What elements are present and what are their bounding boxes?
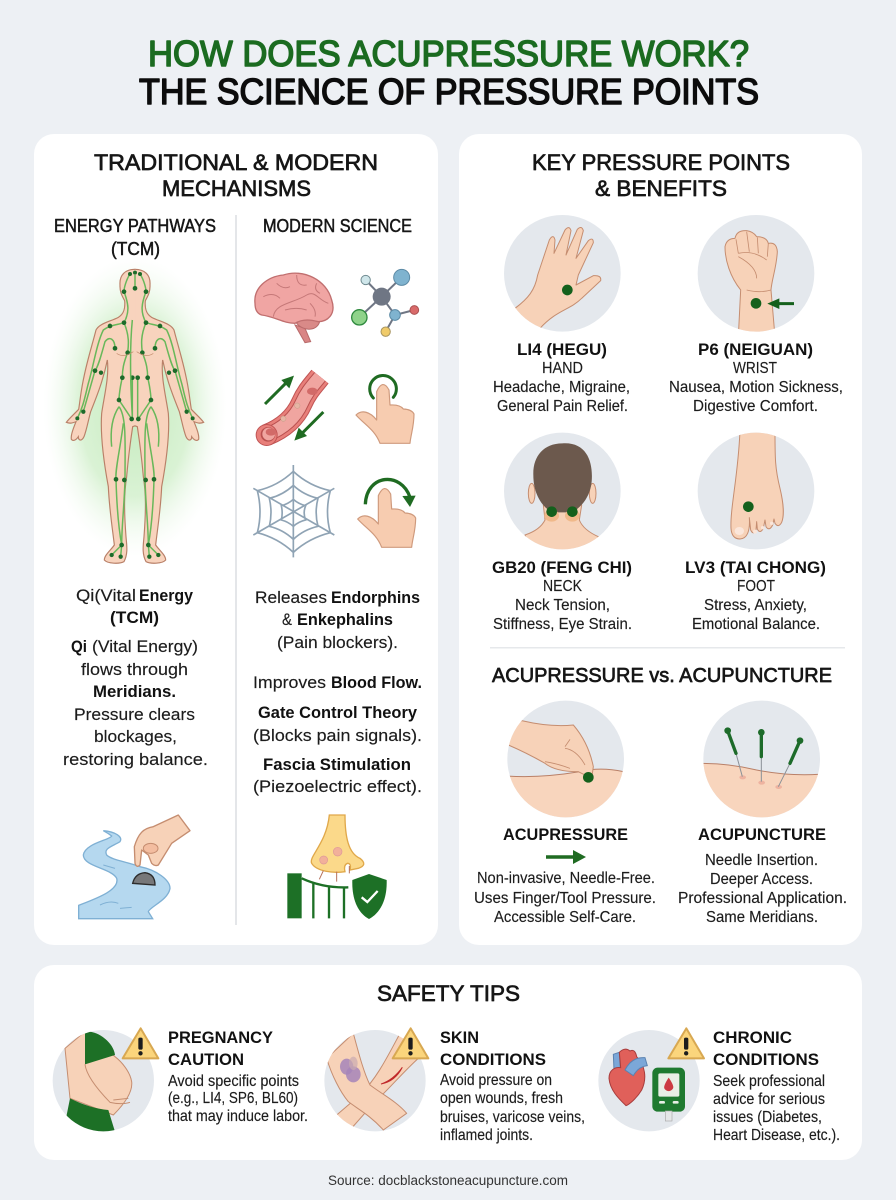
- icon: back of head with GB20 points: [504, 433, 621, 558]
- icon: bruised arms with warning: [324, 1028, 428, 1131]
- comparison: acupuncture: Professional Application.: [678, 890, 847, 907]
- icon: hand with LI4 point: [504, 215, 621, 337]
- safety tip: chronic conditions: issues (Diabetes,: [713, 1109, 822, 1126]
- panel heading: mechanisms: [94, 150, 378, 201]
- column heading: energy pathways: (TCM): [111, 239, 160, 259]
- title: [139, 33, 759, 112]
- safety tip: pregnancy: PREGNANCY: [168, 1028, 274, 1047]
- safety tip: chronic conditions: Seek professional: [713, 1073, 825, 1090]
- pressure point: LV3 foot: [685, 430, 826, 633]
- text block: TCM explanation: flows through: [81, 660, 188, 679]
- text block: modern science explanation: (Pain blockers).: [277, 633, 398, 652]
- text block: modern science explanation: Enkephalins: [297, 610, 393, 629]
- icon: finger press with rotating arrow: [358, 479, 416, 547]
- text block: modern science explanation: Fascia Stimulation: [263, 755, 411, 774]
- panel: traditional and modern mechanisms: [34, 134, 438, 945]
- pressure point: P6 wrist: [669, 215, 843, 415]
- column heading: energy pathways: [54, 216, 216, 259]
- heading: safety tips: SAFETY TIPS: [377, 981, 520, 1006]
- icon: hand moving stone in river: [79, 815, 190, 919]
- pressure point: LV3 foot: Emotional Balance.: [692, 616, 820, 633]
- safety tip: skin conditions: inflamed joints.: [440, 1127, 533, 1144]
- text block: modern science explanation: Endorphins: [331, 588, 420, 607]
- pressure point: LI4 hand: LI4 (HEGU): [517, 340, 607, 359]
- panel heading: key pressure points: [532, 150, 790, 201]
- comparison: acupuncture: [678, 701, 847, 926]
- pressure point: P6 wrist: Digestive Comfort.: [693, 398, 818, 415]
- panel heading: mechanisms: TRADITIONAL & MODERN: [94, 150, 378, 175]
- comparison: acupuncture: Deeper Access.: [710, 871, 813, 888]
- body meridian figure: [43, 257, 227, 563]
- icon: finger pressing skin: [500, 701, 624, 820]
- title: THE SCIENCE OF PRESSURE POINTS: [139, 71, 759, 112]
- pressure point: GB20 neck: NECK: [543, 578, 582, 595]
- safety tip: skin conditions: CONDITIONS: [440, 1050, 546, 1069]
- panel heading: key pressure points: KEY PRESSURE POINTS: [532, 150, 790, 175]
- comparison: acupuncture: Same Meridians.: [706, 909, 818, 926]
- column heading: energy pathways: ENERGY PATHWAYS: [54, 216, 216, 236]
- pressure point: LI4 hand: General Pain Relief.: [497, 398, 628, 415]
- text block: TCM explanation: restoring balance.: [63, 750, 208, 769]
- text block: TCM explanation: Qi(Vital: [76, 586, 136, 605]
- safety tip: pregnancy: Avoid specific points: [168, 1073, 299, 1090]
- text block: TCM explanation: blockages,: [94, 727, 177, 746]
- text block: modern science explanation: (Piezoelectric effect).: [253, 777, 422, 796]
- heading: acupressure vs acupuncture: ACUPRESSURE vs. ACUPUNCTURE: [492, 665, 832, 687]
- pressure point: LI4 hand: Headache, Migraine,: [493, 379, 630, 396]
- text block: TCM explanation: (Vital Energy): [92, 637, 198, 656]
- safety tip: chronic conditions: Heart Disease, etc.).: [713, 1127, 840, 1144]
- text block: modern science explanation: &: [282, 610, 293, 629]
- safety tip: pregnancy: (e.g., LI4, SP6, BL60): [168, 1090, 298, 1107]
- text block: modern science explanation: Blood Flow.: [331, 673, 422, 692]
- panel: key pressure points and comparison: [459, 134, 862, 945]
- safety tip: chronic conditions: advice for serious: [713, 1091, 825, 1108]
- icon: pregnant belly with warning: [53, 1028, 158, 1132]
- text block: TCM explanation: Qi: [71, 637, 87, 656]
- pressure point: GB20 neck: GB20 (FENG CHI): [492, 558, 632, 577]
- safety tip: pregnancy: CAUTION: [168, 1050, 244, 1069]
- panel: safety tips: [34, 965, 862, 1160]
- safety tip: pregnancy: [53, 1028, 308, 1132]
- text block: modern science explanation: [253, 588, 422, 796]
- comparison: acupressure: Non-invasive, Needle-Free.: [477, 870, 655, 887]
- pressure point: LV3 foot: Stress, Anxiety,: [704, 597, 807, 614]
- pressure point: GB20 neck: Stiffness, Eye Strain.: [493, 616, 632, 633]
- icon: finger press with gate arc: [356, 376, 414, 443]
- icon: brain: [255, 273, 333, 343]
- text block: TCM explanation: Energy: [139, 586, 194, 605]
- pressure point: LI4 hand: [493, 215, 630, 415]
- title: HOW DOES ACUPRESSURE WORK?: [148, 33, 749, 74]
- safety tip: chronic conditions: CHRONIC: [713, 1028, 792, 1047]
- comparison: acupressure: Uses Finger/Tool Pressure.: [474, 890, 656, 907]
- source line: Source: docblackstoneacupuncture.com: [328, 1173, 568, 1188]
- text block: TCM explanation: (TCM): [110, 608, 159, 627]
- pressure point: LI4 hand: HAND: [542, 360, 583, 377]
- comparison: acupressure: [474, 701, 656, 926]
- text block: TCM explanation: Meridians.: [93, 682, 176, 701]
- pressure point: GB20 neck: Neck Tension,: [515, 597, 610, 614]
- safety tip: chronic conditions: [598, 1028, 840, 1144]
- panel heading: mechanisms: MECHANISMS: [162, 176, 311, 201]
- comparison: acupressure: Accessible Self-Care.: [494, 909, 636, 926]
- safety tip: skin conditions: Avoid pressure on: [440, 1072, 552, 1089]
- text block: modern science explanation: Gate Control Theory: [258, 703, 418, 722]
- text block: modern science explanation: Improves: [253, 673, 326, 692]
- safety tip: skin conditions: SKIN: [440, 1028, 479, 1047]
- pressure point: P6 wrist: P6 (NEIGUAN): [698, 340, 813, 359]
- pressure point: LV3 foot: FOOT: [737, 578, 775, 595]
- column heading: modern science: MODERN SCIENCE: [263, 216, 412, 236]
- comparison: acupuncture: Needle Insertion.: [705, 852, 818, 869]
- icon: wrist with P6 point: [698, 215, 814, 337]
- comparison: acupuncture: ACUPUNCTURE: [698, 825, 826, 844]
- icon: heart and glucose meter with warning: [598, 1028, 704, 1131]
- comparison: acupressure: ACUPRESSURE: [503, 825, 628, 844]
- safety tip: skin conditions: open wounds, fresh: [440, 1090, 563, 1107]
- safety tip: pregnancy: that may induce labor.: [168, 1108, 308, 1125]
- icon: synapse, gate and shield: [287, 815, 387, 919]
- icon: foot with LV3 point: [698, 430, 814, 549]
- arrow: acupressure: [546, 850, 586, 864]
- pressure point: LV3 foot: LV3 (TAI CHONG): [685, 558, 826, 577]
- pressure point: P6 wrist: Nausea, Motion Sickness,: [669, 379, 843, 396]
- text block: modern science explanation: (Blocks pain signals).: [253, 726, 422, 745]
- pressure point: P6 wrist: WRIST: [733, 360, 777, 377]
- safety tip: chronic conditions: CONDITIONS: [713, 1050, 819, 1069]
- icon: fascia web: [253, 465, 334, 557]
- icon: blood vessel with arrows: [256, 376, 323, 446]
- panel heading: key pressure points: & BENEFITS: [595, 176, 727, 201]
- icon: needles in skin: [700, 701, 823, 820]
- text block: TCM explanation: [63, 586, 208, 769]
- text block: TCM explanation: Pressure clears: [74, 705, 195, 724]
- safety tip: skin conditions: bruises, varicose veins,: [440, 1109, 585, 1126]
- text block: modern science explanation: Releases: [255, 588, 327, 607]
- icon: molecule: [352, 269, 419, 336]
- safety tip: skin conditions: [324, 1028, 585, 1144]
- pressure point: GB20 neck: [492, 433, 632, 633]
